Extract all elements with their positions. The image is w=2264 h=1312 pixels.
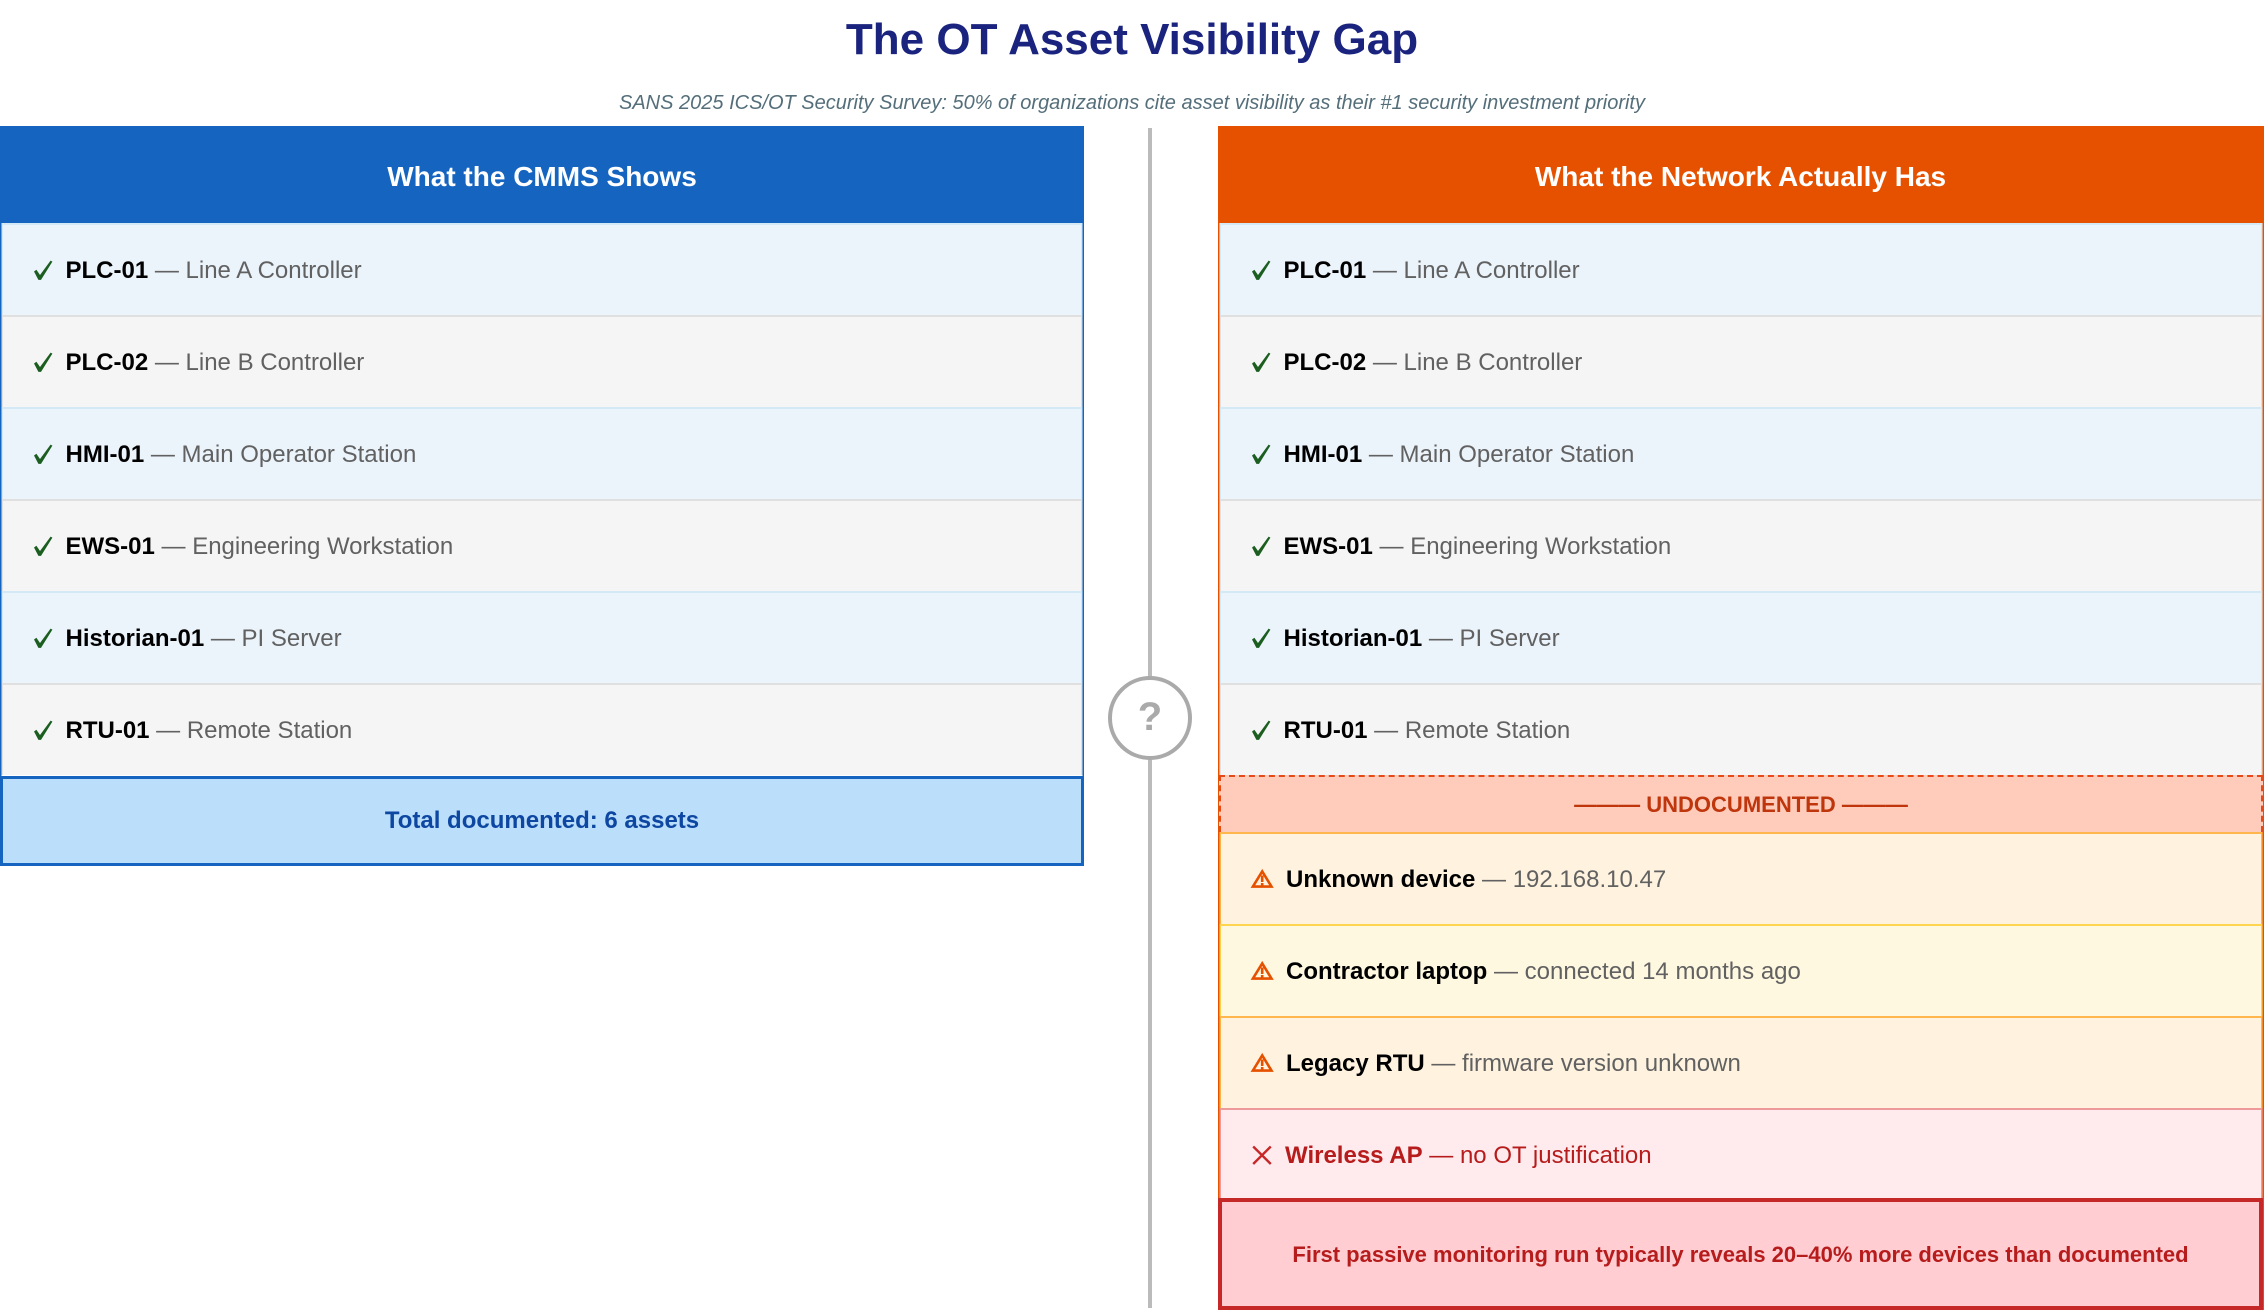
row: PLC-02 (1, 315, 1083, 407)
icon: check (1252, 720, 1270, 740)
icon: check (34, 628, 52, 648)
row: EWS-01: EWS-01 — Engineering Workstation (66, 533, 453, 560)
subtitle: SANS 2025 ICS/OT Security Survey: 50% of organizations cite asset visibility as their #1 security investment priority (619, 92, 1645, 114)
row: Historian-01 (1, 591, 1083, 683)
icon: warning (1250, 869, 1274, 888)
icon: check (1252, 352, 1270, 372)
divider line with question mark (1108, 128, 1192, 1308)
row: wireless AP (1219, 1108, 2263, 1199)
row: Historian-01: Historian-01 — PI Server (66, 625, 342, 652)
row: contractor laptop (1219, 924, 2263, 1016)
row: HMI-01 (1, 407, 1083, 499)
row: HMI-01 (1219, 407, 2263, 499)
callout: passive monitoring finding (1218, 1198, 2263, 1310)
row: EWS-01 (1219, 499, 2263, 591)
row: unknown device (1219, 832, 2263, 924)
panel: what the CMMS shows (0, 126, 1084, 866)
row: HMI-01: HMI-01 — Main Operator Station (1284, 441, 1634, 468)
row: RTU-01 (1, 683, 1083, 775)
row: legacy RTU (1219, 1016, 2263, 1108)
row: EWS-01 (1, 499, 1083, 591)
row: contractor laptop: Contractor laptop — connected 14 months ago (1286, 958, 1801, 985)
icon: check (34, 352, 52, 372)
icon: check (34, 720, 52, 740)
row: PLC-02 (1219, 315, 2263, 407)
row: Historian-01 (1219, 591, 2263, 683)
icon: check (1252, 536, 1270, 556)
row: PLC-01 (1219, 223, 2263, 315)
row: PLC-01 (1, 223, 1083, 315)
row: legacy RTU: Legacy RTU — firmware version unknown (1286, 1050, 1741, 1077)
row: PLC-01: PLC-01 — Line A Controller (1284, 257, 1580, 284)
title: The OT Asset Visibility Gap (846, 15, 1418, 64)
callout: passive monitoring finding: First passive monitoring run typically reveals 20–40% more devices than documented (1292, 1242, 2189, 1267)
row: PLC-02: PLC-02 — Line B Controller (66, 349, 364, 376)
icon: check (1252, 444, 1270, 464)
panel heading: CMMS: What the CMMS Shows (387, 161, 697, 192)
row: Historian-01: Historian-01 — PI Server (1284, 625, 1560, 652)
icon: check (1252, 260, 1270, 280)
undocumented band: ——— UNDOCUMENTED ——— (1574, 792, 1908, 817)
row: unknown device: Unknown device — 192.168.10.47 (1286, 866, 1666, 893)
icon: check (1252, 628, 1270, 648)
icon: check (34, 260, 52, 280)
vertical divider (1148, 128, 1152, 1308)
row: RTU-01: RTU-01 — Remote Station (1284, 717, 1570, 744)
icon: warning (1250, 961, 1274, 980)
question mark circle (1108, 676, 1192, 760)
row: PLC-02: PLC-02 — Line B Controller (1284, 349, 1582, 376)
question mark circle: ? (1138, 695, 1162, 739)
panel: what the network actually has (1218, 126, 2264, 1310)
icon: check (34, 444, 52, 464)
icon: warning (1250, 1053, 1274, 1072)
row: HMI-01: HMI-01 — Main Operator Station (66, 441, 416, 468)
total documented footer (0, 776, 1084, 866)
row: EWS-01: EWS-01 — Engineering Workstation (1284, 533, 1671, 560)
row: RTU-01 (1219, 683, 2263, 775)
row: RTU-01: RTU-01 — Remote Station (66, 717, 352, 744)
panel heading: network (1218, 126, 2264, 223)
row: wireless AP: Wireless AP — no OT justification (1285, 1142, 1652, 1169)
icon: cross (1252, 1146, 1272, 1165)
undocumented band (1219, 775, 2263, 832)
row: PLC-01: PLC-01 — Line A Controller (66, 257, 362, 284)
panel heading: network: What the Network Actually Has (1535, 161, 1946, 192)
icon: check (34, 536, 52, 556)
total documented footer: Total documented: 6 assets (385, 807, 699, 834)
panel heading: CMMS (0, 126, 1084, 223)
